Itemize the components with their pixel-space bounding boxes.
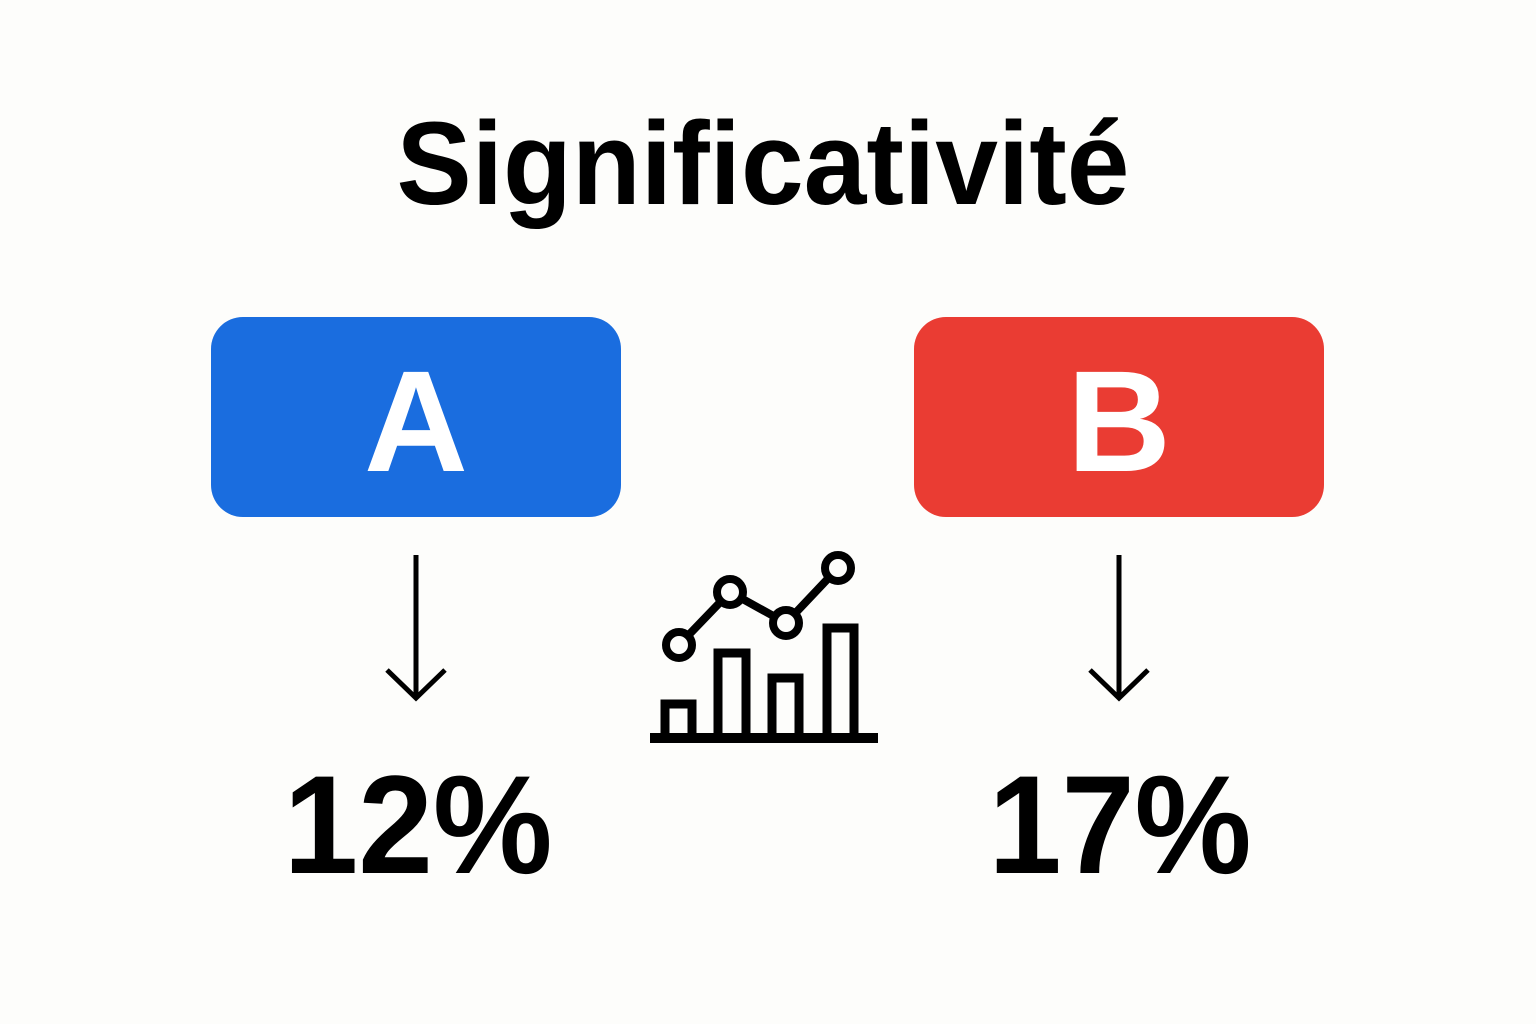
arrow: B down — [1090, 555, 1148, 698]
value B: 17% — [988, 746, 1252, 903]
panel: variant A: A — [364, 341, 468, 502]
value A: 12% — [284, 746, 552, 903]
icon: chart — [650, 555, 878, 738]
panel: variant A — [211, 317, 621, 517]
panel: variant B — [914, 317, 1324, 517]
arrow: A down — [387, 555, 445, 698]
title: Significativité — [396, 98, 1130, 230]
panel: variant B: B — [1067, 341, 1171, 502]
